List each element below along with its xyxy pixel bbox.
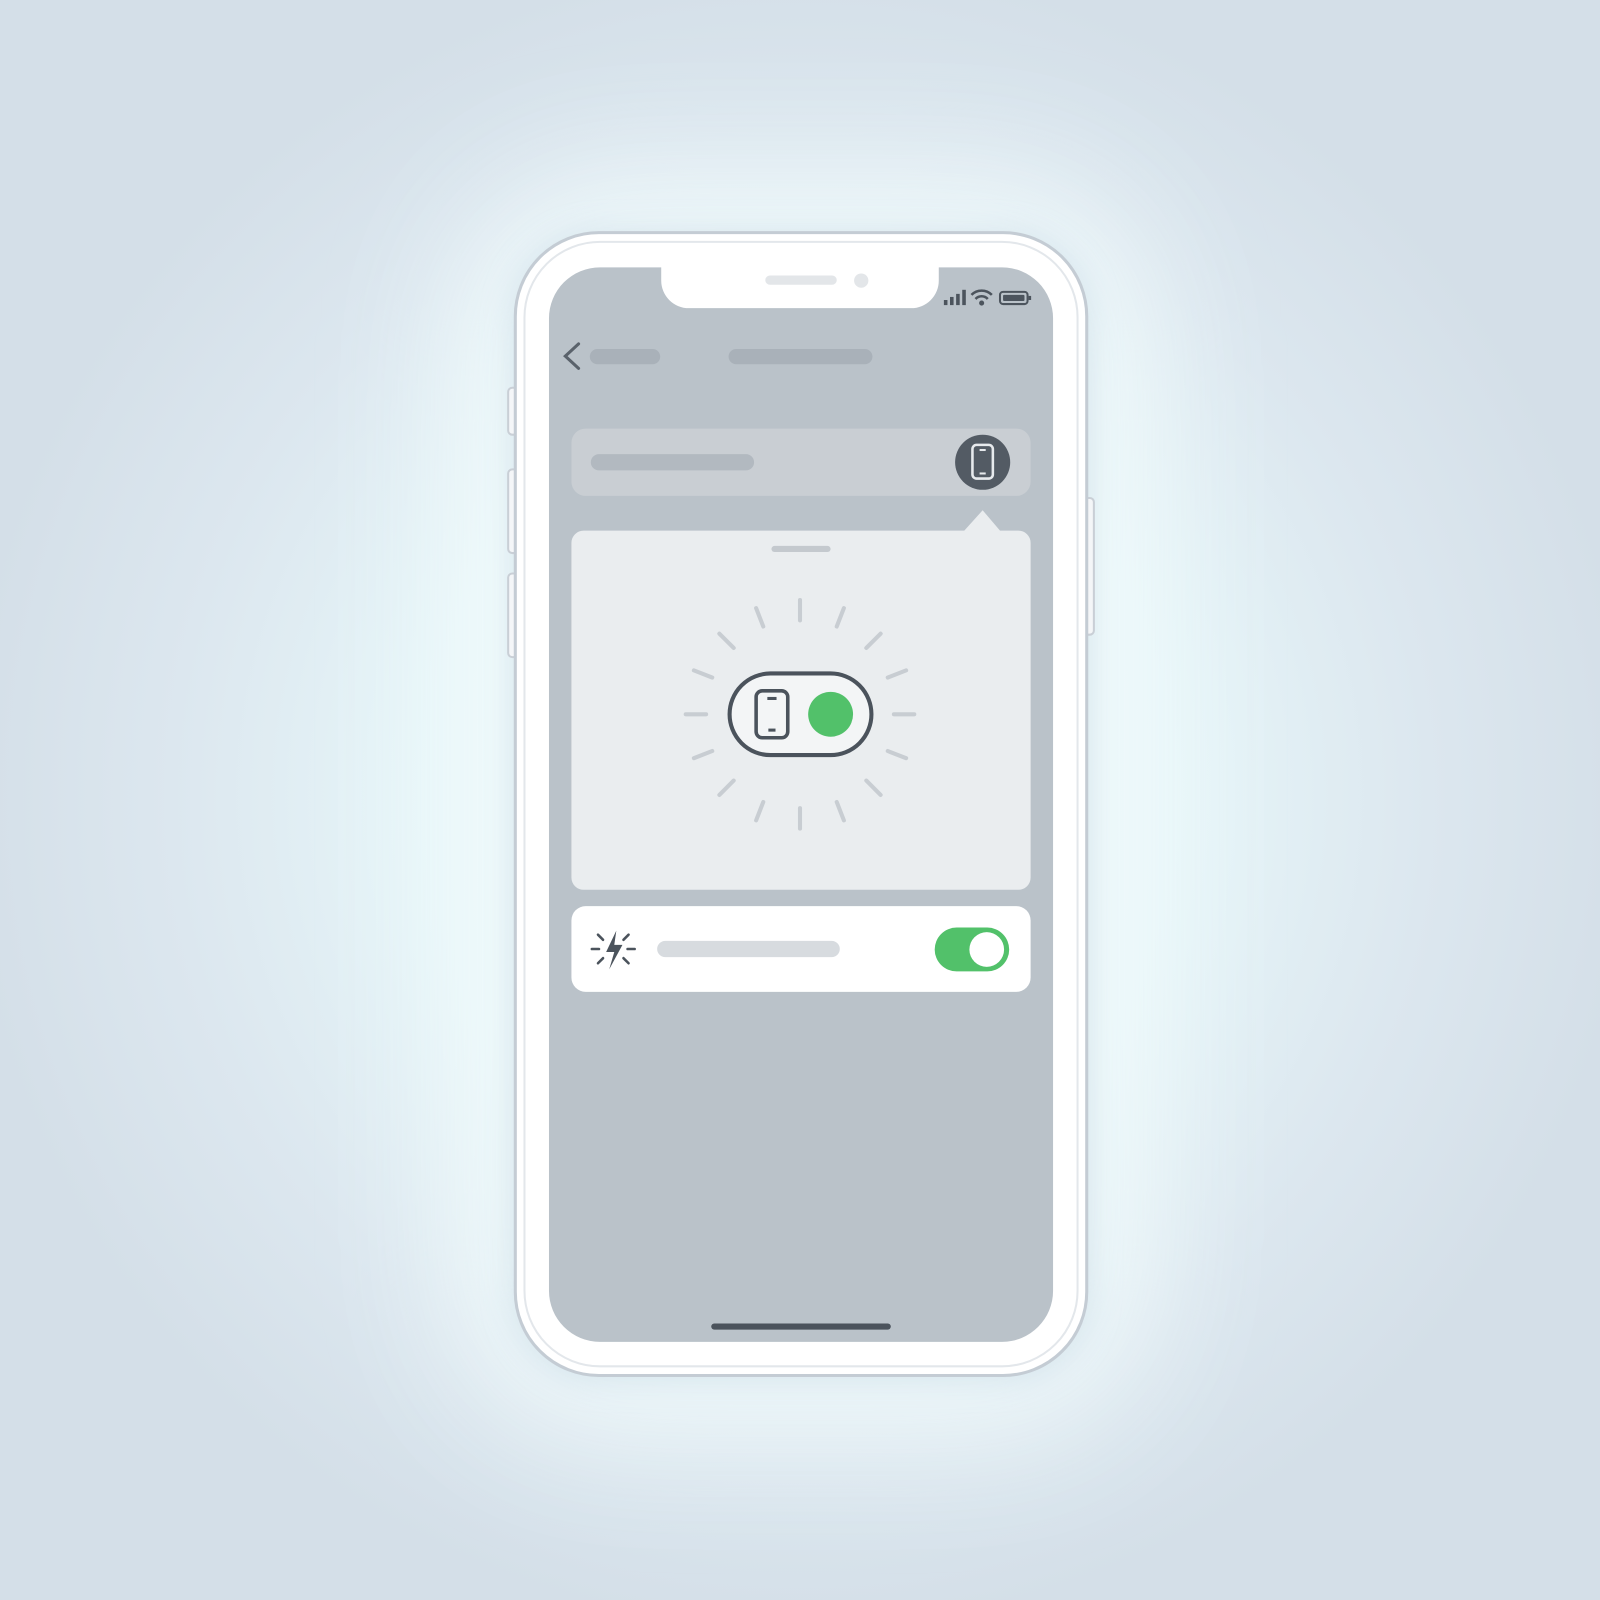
phone body xyxy=(508,231,1094,1382)
home indicator xyxy=(711,1323,891,1330)
side buttons xyxy=(508,388,518,435)
popup card xyxy=(571,510,1031,890)
status icons xyxy=(944,290,1031,306)
search bar xyxy=(571,429,1031,496)
notch speaker and camera xyxy=(765,276,837,285)
icon: sunburst toggle xyxy=(686,600,914,829)
toggle row xyxy=(571,906,1031,992)
screen xyxy=(549,267,1053,1342)
nav bar xyxy=(565,344,872,368)
